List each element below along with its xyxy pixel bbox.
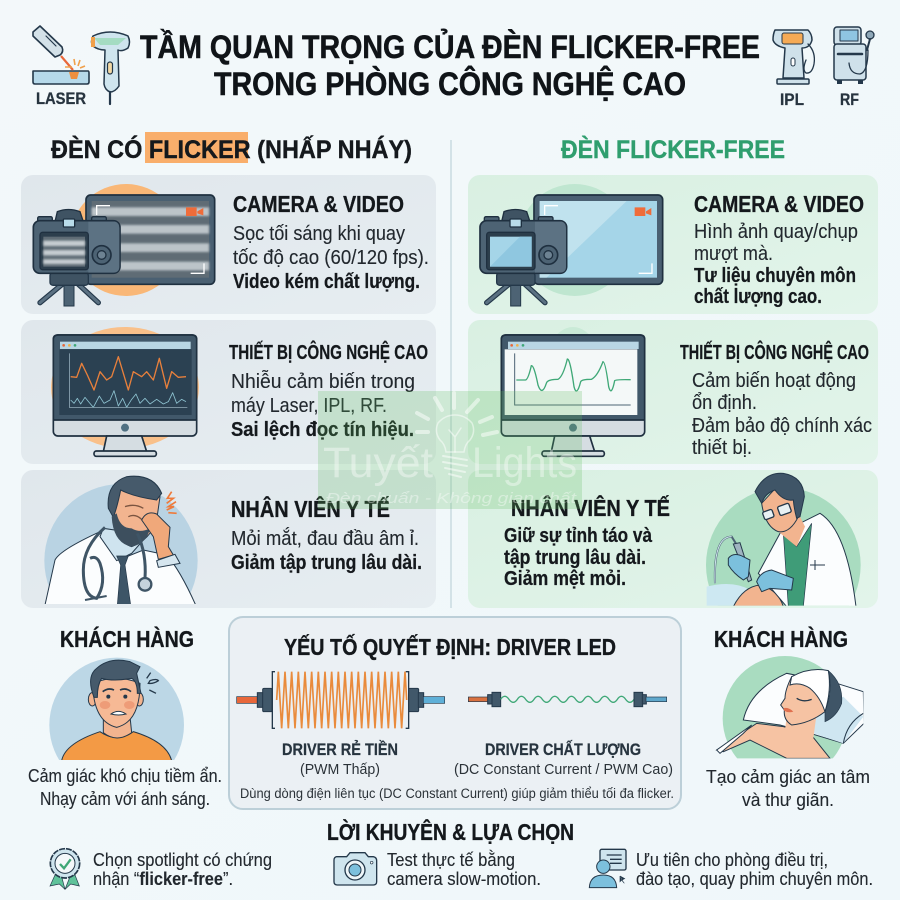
panel: flicker-free medical staff [468, 470, 878, 608]
text: medical staff, flicker-free: Giữ sự tỉnh táo và [504, 525, 653, 547]
tip: certified spotlight: Chọn spotlight có chứng [93, 850, 272, 870]
text: uneasy customer description [28, 766, 222, 809]
illustration: focused doctor treating patient [706, 472, 861, 606]
text: uneasy customer description: Nhạy cảm với ánh sáng. [40, 789, 210, 809]
tip: treatment room priority: Ưu tiên cho phòng điều trị, [636, 850, 828, 870]
text: high-tech devices, flicker-free: ổn định. [692, 392, 757, 414]
watermark: Tuyết Lights [318, 391, 582, 509]
text: high-tech devices, flicker: THIẾT BỊ CÔNG NGHỆ CAO [229, 340, 428, 364]
heading: flicker column: ĐÈN CÓ FLICKER (NHẤP NHÁY) [51, 134, 412, 164]
text: high-tech devices, flicker: máy Laser, IPL, RF. [231, 395, 387, 417]
section: relaxed customer: KHÁCH HÀNG [714, 625, 848, 652]
text: medical staff, flicker: Mỏi mắt, đau đầu âm ỉ. [231, 527, 419, 550]
label: cheap driver: DRIVER RẺ TIỀN [282, 740, 398, 759]
text: camera and video, flicker: CAMERA & VIDEO [233, 191, 404, 217]
icon: certification rosette [50, 849, 80, 889]
text: high-tech devices, flicker-free: Cảm biến hoạt động [692, 370, 856, 392]
text: camera and video, flicker-free: Tư liệu chuyên môn [694, 265, 856, 287]
title: TẦM QUAN TRỌNG CỦA ĐÈN FLICKER-FREE [140, 29, 760, 65]
watermark: Tuyết Lights: Lights [472, 439, 577, 487]
label: quality driver: DRIVER CHẤT LƯỢNG [485, 740, 641, 759]
icon: IPL machine [773, 30, 814, 109]
tip: slow-motion camera test: camera slow-motion. [387, 869, 541, 889]
icon: presenter with screen [589, 849, 626, 888]
note: DC constant current: Dùng dòng điện liên tục (DC Constant Current) giúp giảm thiểu tối đa flicker. [240, 786, 674, 801]
illustration: relaxed customer [716, 656, 864, 758]
illustration: uncomfortable customer [49, 658, 184, 760]
heading: advice: LỜI KHUYÊN & LỰA CHỌN [327, 818, 574, 845]
panel: flicker-free high-tech devices [468, 320, 878, 464]
text: medical staff, flicker [231, 495, 422, 574]
text: camera and video, flicker-free: Hình ảnh quay/chụp [694, 221, 858, 243]
text: high-tech devices, flicker: Sai lệch đọc tín hiệu. [231, 419, 414, 441]
text: camera and video, flicker: Video kém chất lượng. [233, 271, 420, 293]
panel: flicker high-tech devices [21, 320, 436, 464]
tip: treatment room priority: đào tạo, quay phim chuyên môn. [636, 869, 873, 889]
text: relaxed customer description [706, 767, 870, 810]
icon: camera with striped monitor [33, 184, 215, 306]
text: camera and video, flicker-free [694, 191, 864, 308]
tip: slow-motion camera test: Test thực tế bằng [387, 849, 515, 870]
label: cheap driver: (PWM Thấp) [300, 761, 380, 778]
text: medical staff, flicker-free: NHÂN VIÊN Y TẾ [511, 494, 670, 521]
text: high-tech devices, flicker: Nhiễu cảm biến trong [231, 370, 415, 393]
text: relaxed customer description: và thư giãn. [742, 790, 834, 810]
icon: camera [334, 853, 377, 885]
text: high-tech devices, flicker-free [680, 340, 872, 459]
panel: flicker-free camera and video [468, 175, 878, 314]
label: quality driver [454, 740, 673, 778]
tip: certified spotlight [50, 849, 272, 889]
diagram: quality driver with stable current [468, 692, 667, 707]
text: camera and video, flicker: tốc độ cao (60/120 fps). [233, 247, 429, 269]
label: cheap driver [282, 740, 398, 778]
icon: RF machine: RF [840, 90, 859, 109]
text: high-tech devices, flicker-free: Đảm bảo độ chính xác [692, 415, 872, 437]
panel: LED driver [229, 617, 681, 809]
section: uneasy customer: KHÁCH HÀNG [60, 625, 194, 652]
icon: RF machine [834, 27, 874, 109]
icon: laser device: LASER [36, 89, 86, 108]
diagram: cheap driver with high ripple [237, 672, 445, 728]
text: camera and video, flicker: Sọc tối sáng khi quay [233, 223, 405, 245]
text: medical staff, flicker-free [504, 494, 670, 590]
icon: laser device [33, 26, 89, 108]
icon: IPL machine: IPL [780, 90, 804, 109]
text: camera and video, flicker [233, 191, 429, 293]
icon: monitor with noisy signal [51, 327, 199, 456]
tip: treatment room priority [589, 849, 873, 889]
text: high-tech devices, flicker [229, 340, 428, 441]
heading: flicker-free column: ĐÈN FLICKER-FREE [561, 135, 785, 164]
text: relaxed customer description: Tạo cảm giác an tâm [706, 767, 870, 787]
text: camera and video, flicker-free: CAMERA & VIDEO [694, 191, 864, 217]
section: uneasy customer [28, 625, 222, 809]
text: camera and video, flicker-free: chất lượng cao. [694, 286, 822, 308]
illustration: tired doctor [44, 476, 198, 604]
section: relaxed customer [706, 625, 870, 810]
text: medical staff, flicker: NHÂN VIÊN Y TẾ [231, 495, 390, 522]
icon: monitor with stable signal [501, 327, 645, 456]
text: high-tech devices, flicker-free: thiết bị. [692, 437, 752, 459]
panel: flicker medical staff [21, 470, 436, 608]
panel: flicker camera and video [21, 175, 436, 314]
text: camera and video, flicker-free: mượt mà. [694, 243, 773, 265]
watermark: Tuyết Lights: Tuyết [323, 439, 433, 487]
title: TRONG PHÒNG CÔNG NGHỆ CAO [214, 66, 686, 102]
text: medical staff, flicker-free: tập trung lâu dài. [504, 547, 646, 569]
tip: slow-motion camera test [334, 849, 541, 889]
label: quality driver: (DC Constant Current / PWM Cao) [454, 761, 673, 778]
tip: certified spotlight: nhận “flicker-free”. [93, 869, 233, 889]
icon: camera with clean monitor [480, 184, 663, 306]
text: uneasy customer description: Cảm giác khó chịu tiềm ẩn. [28, 766, 222, 786]
text: medical staff, flicker: Giảm tập trung lâu dài. [231, 552, 422, 574]
heading: LED driver: YẾU TỐ QUYẾT ĐỊNH: DRIVER LED [284, 633, 616, 660]
icon: IPL handpiece [91, 32, 130, 104]
watermark: Tuyết Lights: Đèn chuẩn - Không gian chất [326, 490, 577, 507]
title [140, 29, 760, 102]
text: medical staff, flicker-free: Giảm mệt mỏi. [504, 568, 626, 590]
